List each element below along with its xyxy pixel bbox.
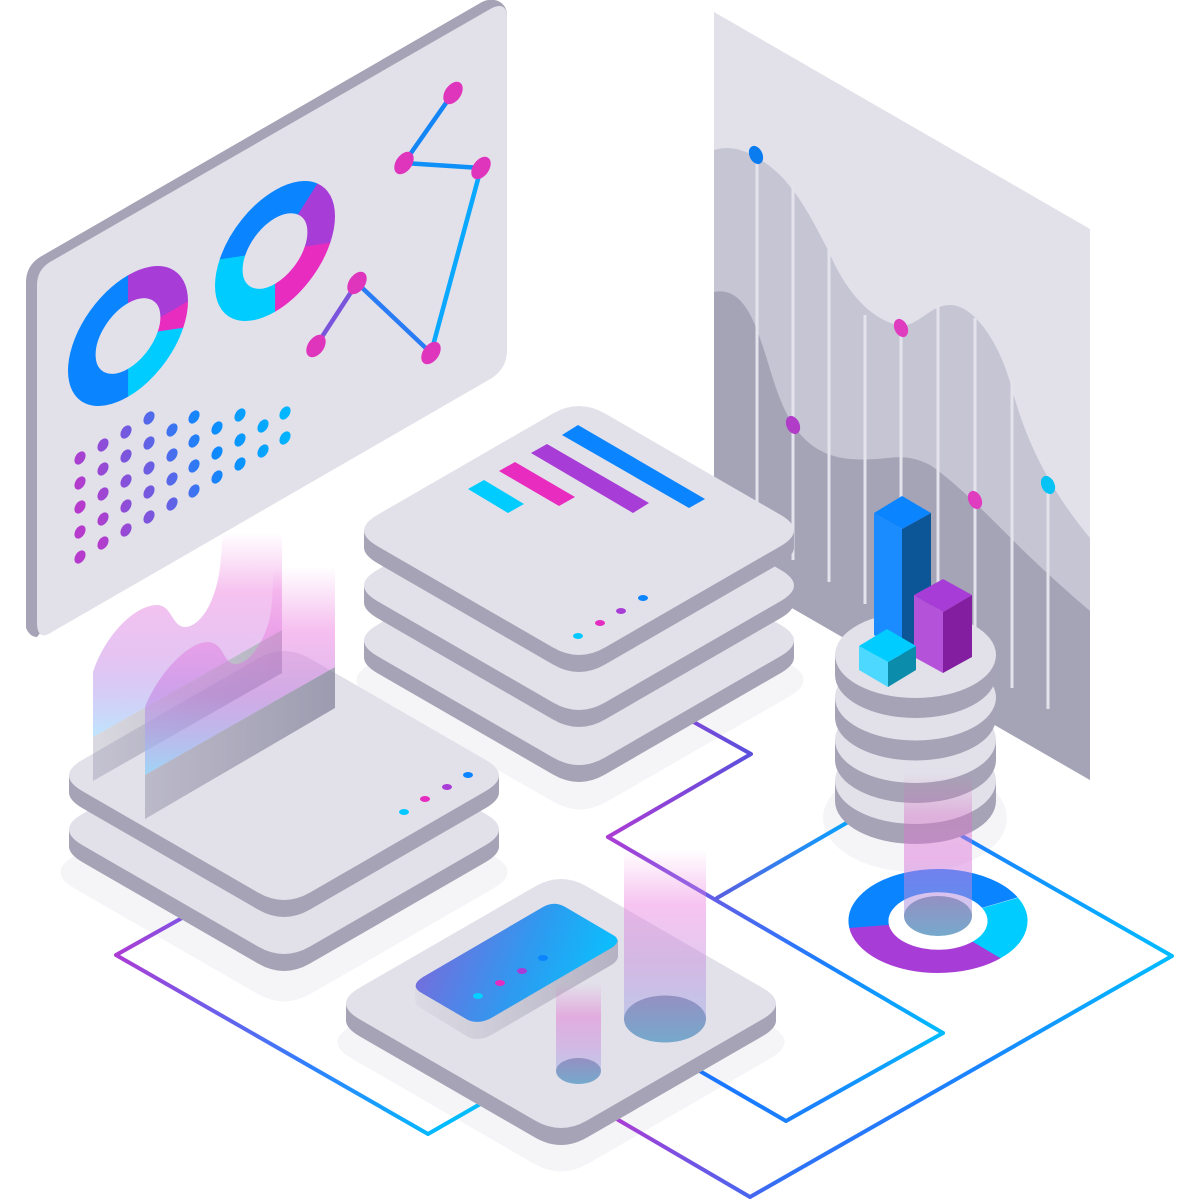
chart: left donut	[82, 262, 174, 410]
chart: upper area	[714, 148, 1090, 780]
bar: purple	[531, 444, 649, 513]
stack: left platforms	[69, 651, 499, 971]
panel: right wall area chart	[714, 12, 1090, 780]
chart: data points	[746, 144, 1058, 511]
slab shadows	[60, 551, 1007, 1171]
status dots	[573, 595, 648, 639]
stack: center platforms	[364, 406, 794, 782]
3d bar: cyan cube	[859, 629, 916, 687]
phone card	[416, 904, 618, 1022]
chart: dot matrix	[72, 404, 293, 566]
chart: network line	[316, 93, 481, 353]
stack: cylinder	[835, 612, 996, 844]
connector lines	[116, 720, 1172, 1197]
chart: vertical lines	[757, 155, 1048, 709]
line: left loop	[116, 918, 482, 1134]
bar: cyan	[468, 480, 524, 513]
hologram: back area chart	[93, 533, 282, 781]
chart: right donut	[229, 177, 321, 325]
3d bar: blue	[874, 496, 931, 660]
card dots	[473, 955, 548, 999]
large pool	[624, 996, 706, 1042]
cylinder beam	[904, 773, 972, 916]
line: lower return	[698, 1033, 943, 1121]
chart: lower area	[714, 291, 1090, 780]
line: upper loop	[608, 720, 751, 837]
line: middle run	[608, 837, 943, 1033]
cylinder pool	[904, 896, 972, 936]
large beam	[624, 850, 706, 1020]
small beam	[556, 983, 601, 1071]
line: large outer loop	[615, 836, 1172, 1197]
donut: bottom right	[845, 867, 1031, 975]
platform: bottom slab	[346, 850, 776, 1145]
line: cylinder left link	[717, 818, 855, 898]
bar: pink	[499, 462, 575, 506]
chart: network nodes	[302, 78, 495, 368]
bar: blue	[562, 425, 705, 508]
status dots	[399, 772, 473, 815]
3d bar: purple	[914, 579, 972, 673]
phone card side	[415, 940, 618, 1039]
panel: left monitor	[26, 0, 507, 637]
hologram: front area chart	[145, 567, 335, 819]
small pool	[556, 1058, 601, 1084]
